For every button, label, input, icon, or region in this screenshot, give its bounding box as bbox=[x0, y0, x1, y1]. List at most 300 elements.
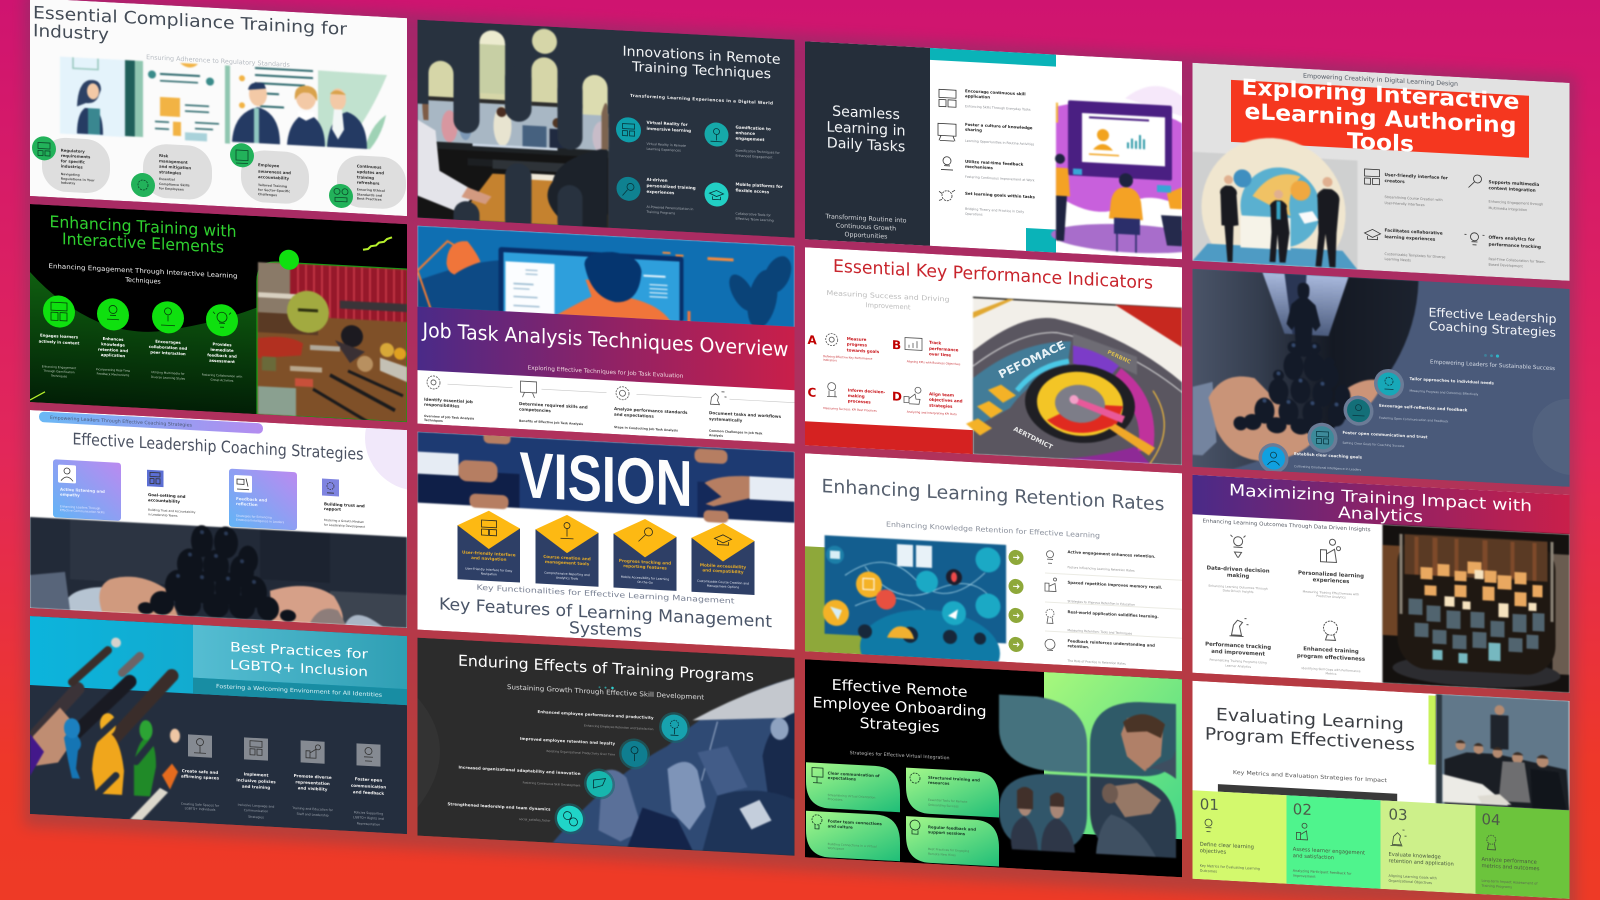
analytics benefits: Personalized learning bbox=[1298, 570, 1364, 580]
subtitle: Enhancing Learning Outcomes Through Data Driven Insights bbox=[1202, 518, 1371, 533]
tools list: performance tracking bbox=[1488, 242, 1541, 250]
task list: Encourage continuous skill bbox=[965, 88, 1026, 96]
subtitle: Fostering a Welcoming Environment for All Identities bbox=[216, 684, 382, 699]
effects list: Enhancing Employee Retention and Satisfaction bbox=[584, 723, 654, 731]
tools list: learning experiences bbox=[1384, 234, 1436, 243]
title: Evaluating Learning bbox=[1216, 705, 1404, 735]
feature cards: Progress tracking and bbox=[619, 558, 671, 566]
analytics benefits: Identifying Skill Gaps with Performance bbox=[1302, 666, 1361, 673]
retention tips list: The Role of Practice in Retention Rates bbox=[1067, 659, 1126, 666]
analytics benefits: Predictive Analytics bbox=[1316, 594, 1346, 599]
feature text: Gamification to bbox=[736, 125, 771, 131]
KPI list: strategies bbox=[929, 403, 953, 409]
gradient title band bbox=[418, 307, 794, 390]
feature bubbles: for specific bbox=[61, 158, 86, 165]
title bbox=[624, 46, 780, 80]
faint decorative circle bbox=[1532, 397, 1600, 477]
panel: Maximizing Training Impact with Analytics bbox=[1192, 475, 1570, 693]
strategy cards: Feedback and bbox=[236, 496, 267, 503]
four technique columns: competencies bbox=[519, 407, 551, 413]
title bbox=[1244, 78, 1518, 152]
faint arc bbox=[418, 698, 440, 809]
KPI list: Aligning KPIs with Business Objectives bbox=[907, 359, 961, 366]
feature cards: reporting features bbox=[623, 563, 667, 571]
coaching steps: Cultivating Emotional Intelligence in Leaders bbox=[1294, 464, 1362, 472]
numbered metric columns: 03 bbox=[1388, 805, 1408, 824]
feature text: peer interaction bbox=[150, 349, 186, 356]
business team bbox=[232, 106, 367, 149]
panel: Evaluating Learning Program Effectiveness bbox=[1192, 681, 1570, 899]
onboarding cards: resources bbox=[928, 780, 950, 786]
analytics benefits: Enhanced training bbox=[1303, 646, 1359, 655]
KPI list: Align team bbox=[929, 391, 954, 398]
practice columns: LGBTQ+ Rights and bbox=[353, 815, 384, 821]
feature text: experiences bbox=[646, 189, 675, 195]
compliance illustration bbox=[60, 57, 387, 152]
title: Key Features of Learning Management bbox=[439, 594, 772, 631]
title: Enhancing Training with bbox=[50, 212, 237, 241]
feature text: enhance bbox=[736, 130, 755, 136]
feature bubbles: and mitigation bbox=[159, 164, 191, 170]
numbered metric columns: retention and application bbox=[1388, 858, 1454, 868]
KPI list: A bbox=[808, 333, 817, 347]
VISION word: VISION bbox=[520, 438, 692, 520]
analytics benefits: Data-Driven Insights bbox=[1223, 588, 1254, 594]
strategy cards: Strategies for Enhancing bbox=[236, 514, 272, 520]
KPI list: processes bbox=[848, 398, 871, 405]
KPI list bbox=[808, 332, 963, 417]
coaching steps: Tailor approaches to individual needs bbox=[1409, 376, 1495, 385]
strategy cards: Emotional Intelligence in Leaders bbox=[236, 518, 285, 524]
onboarding cards: Building Connections in a Virtual bbox=[828, 842, 877, 849]
workshop photo bbox=[257, 261, 407, 424]
effects list: Boosting Organizational Productivity Over Time bbox=[547, 749, 615, 757]
pawns photo bbox=[30, 516, 407, 628]
pager dots bbox=[598, 686, 614, 689]
retention tips list bbox=[1008, 546, 1182, 669]
four technique columns: Overview of Job Task Analysis bbox=[424, 414, 474, 421]
four technique columns: Determine required skills and bbox=[519, 401, 588, 410]
knowledge network illustration bbox=[823, 535, 1006, 694]
KPI list: Measuring Success: KPI Best Practices bbox=[823, 406, 877, 413]
feature bubbles bbox=[32, 132, 406, 211]
title bbox=[1229, 480, 1532, 532]
subtitle: Improvement bbox=[866, 301, 911, 312]
feature text bbox=[38, 334, 242, 382]
green block bbox=[805, 546, 959, 659]
tools list bbox=[1364, 169, 1546, 270]
analytics benefits: Enhancing Learning Outcomes Through bbox=[1208, 584, 1268, 591]
strategy cards: Building trust and bbox=[324, 501, 365, 508]
coaching steps: Measuring Progress and Outcomes Effectively bbox=[1409, 389, 1478, 396]
desk illustration bbox=[418, 226, 797, 333]
title panel bbox=[193, 625, 407, 689]
four technique columns: systematically bbox=[709, 416, 743, 423]
feature text: Virtual Reality for bbox=[646, 120, 688, 127]
business illustration bbox=[1192, 137, 1358, 270]
retention tips list: Factors Influencing Learning Retention Rates bbox=[1068, 565, 1135, 573]
four technique columns: Document tasks and workflows bbox=[709, 410, 782, 419]
teal accent blocks bbox=[930, 48, 1056, 253]
panel: Seamless Learning in Daily Tasks bbox=[805, 41, 1211, 261]
feature cards: Course creation and bbox=[543, 554, 591, 561]
KPI list: progress bbox=[847, 341, 868, 348]
practice columns: Create safe and bbox=[182, 768, 218, 775]
feature cards: On-the-Go bbox=[637, 580, 653, 585]
numbered metric columns: Evaluate knowledge bbox=[1388, 852, 1441, 861]
practice columns: Training and Education for bbox=[291, 806, 334, 812]
feature text: AI-driven bbox=[646, 177, 668, 183]
feature bubbles: requirements bbox=[61, 153, 91, 159]
KPI list: over time bbox=[929, 351, 951, 357]
title bbox=[813, 677, 987, 739]
feature text: Feedback Mechanisms bbox=[97, 372, 130, 377]
subtitle: Empowering Creativity in Digital Learning Design bbox=[1303, 73, 1458, 88]
numbered metric columns: Analyze performance bbox=[1482, 857, 1537, 866]
practice columns: Staff and Leadership bbox=[297, 812, 329, 818]
tools list: Learning Needs bbox=[1384, 257, 1411, 262]
KPI list: Track bbox=[929, 340, 942, 345]
title: Program Effectiveness bbox=[1205, 724, 1415, 756]
numbered metric columns: Long-term Impact Assessment of bbox=[1482, 879, 1538, 886]
subtitle: Transforming Learning Experiences in a Digital World bbox=[630, 93, 773, 106]
feature bubbles: management bbox=[159, 158, 188, 165]
title: Best Practices for bbox=[230, 640, 369, 663]
panel: Essential Compliance Training bbox=[30, 0, 407, 216]
retention tips list: Feedback reinforces understanding and bbox=[1068, 638, 1155, 648]
panel: Innovations in Remote Training bbox=[418, 20, 794, 259]
feature cards: and compatibility bbox=[702, 567, 744, 575]
panel: Job Task Analysis Techniques Overview bbox=[418, 226, 797, 444]
feature bubbles: awareness and bbox=[258, 169, 291, 175]
analytics benefits: experiences bbox=[1313, 577, 1349, 585]
practice columns: communication bbox=[351, 783, 386, 790]
onboarding cards: Clear communication of bbox=[828, 770, 880, 778]
KPI list: objectives and bbox=[929, 397, 963, 404]
panel: Essential Key Performance Indicators bbox=[805, 247, 1182, 465]
feature bubbles: Industry bbox=[61, 181, 75, 185]
analytics benefits: Measuring Training Effectiveness with bbox=[1303, 589, 1359, 596]
subtitle bbox=[826, 214, 906, 238]
analytics benefits: program effectiveness bbox=[1297, 653, 1365, 663]
task list: Fostering Continuous Improvement at Work bbox=[965, 175, 1035, 182]
numbered metric columns: 02 bbox=[1293, 800, 1312, 819]
onboarding cards: Regular feedback and bbox=[928, 824, 976, 832]
subtitle bbox=[49, 263, 237, 284]
numbered metric columns: metrics and outcomes bbox=[1482, 863, 1540, 872]
gradient title band bbox=[1192, 475, 1570, 534]
feature bubbles: updates and bbox=[357, 169, 384, 175]
practice columns: Representation bbox=[357, 821, 380, 827]
feature cards: and navigation bbox=[471, 555, 506, 562]
numbered metric columns: Training Programs bbox=[1481, 884, 1512, 889]
feature text: collaboration and bbox=[149, 344, 187, 351]
practice columns: LGBTQ+ Individuals bbox=[185, 806, 216, 812]
onboarding cards: Remote New Hires bbox=[928, 852, 956, 857]
strategy cards: Enhancing Leaders Through bbox=[60, 504, 101, 510]
effects list: Fostering Continuous Skill Development bbox=[523, 781, 581, 788]
effects list bbox=[448, 700, 690, 841]
title bbox=[1205, 704, 1415, 756]
strategy cards: rapport bbox=[324, 506, 341, 512]
subtitle: Strategies for Effective Virtual Integration bbox=[850, 750, 950, 761]
cyan header bbox=[30, 616, 407, 705]
numbered metric columns: Aligning Learning Goals with bbox=[1388, 874, 1437, 880]
feature bubbles: Ensuring Ethical bbox=[357, 187, 385, 193]
subtitle: Techniques bbox=[124, 276, 161, 286]
numbered metric columns bbox=[1192, 790, 1570, 899]
standing learner bbox=[1056, 168, 1070, 196]
numbered metric columns: Outcomes bbox=[1200, 869, 1217, 874]
feature text: Utilizing Multimedia for bbox=[151, 370, 186, 376]
feature bubbles: training bbox=[357, 174, 374, 180]
green backdrop bbox=[1044, 672, 1182, 839]
title: Learning in bbox=[826, 119, 906, 140]
feature text: engagement bbox=[736, 136, 765, 142]
feature bubbles: Tailored Training bbox=[258, 183, 287, 188]
title: Industry bbox=[33, 21, 109, 45]
VISION banner photo bbox=[418, 428, 794, 527]
title: LGBTQ+ Inclusion bbox=[230, 658, 368, 680]
petal portrait collage bbox=[999, 695, 1176, 858]
four technique columns: Analyze performance standards bbox=[614, 406, 688, 415]
strategy cards: empathy bbox=[60, 492, 80, 498]
practice columns: affirming spaces bbox=[181, 774, 220, 781]
practice columns: and feedback bbox=[353, 789, 384, 796]
corner circle bbox=[365, 388, 465, 493]
feature text: Through Gamification bbox=[42, 369, 75, 374]
onboarding cards: Foster team connections bbox=[828, 818, 883, 826]
title: eLearning Authoring bbox=[1244, 100, 1516, 139]
effects list: Strengthened leadership and team dynamics bbox=[447, 801, 551, 812]
retention tips list: Real-world application solidifies learning. bbox=[1068, 609, 1159, 619]
title: Essential Key Performance Indicators bbox=[833, 257, 1153, 294]
practice columns: Policies Supporting bbox=[354, 810, 383, 816]
title: Effective Remote bbox=[832, 678, 968, 701]
performance gauge photo bbox=[966, 296, 1182, 465]
tools list: Offers analytics for bbox=[1488, 235, 1536, 243]
strategy cards: Fostering a Growth Mindset bbox=[324, 518, 365, 524]
feature text: Effective Team Learning bbox=[736, 217, 774, 223]
KPI list: D bbox=[892, 389, 902, 404]
analytics benefits: and improvement bbox=[1211, 649, 1265, 658]
coaching steps: Fostering Open Communication and Feedback bbox=[1379, 416, 1449, 423]
title: Innovations in Remote bbox=[622, 44, 780, 68]
four technique columns: Identify essential job bbox=[424, 397, 473, 404]
title: Enhancing Learning Retention Rates bbox=[822, 476, 1164, 515]
panel: Effective Remote Employee Onboarding Strategies bbox=[805, 659, 1182, 877]
four technique columns bbox=[424, 375, 794, 442]
numbered metric columns: objectives bbox=[1200, 848, 1226, 856]
practice columns: Creating Safe Spaces for bbox=[181, 802, 220, 808]
panel: Key Features of LMS bbox=[418, 428, 794, 650]
subtitle: Empowering Leaders for Sustainable Success bbox=[1430, 359, 1555, 372]
title bbox=[1428, 305, 1556, 340]
practice columns: Foster open bbox=[355, 776, 382, 783]
practice columns: Promote diverse bbox=[294, 773, 332, 780]
analytics benefits: Learner Analytics bbox=[1225, 664, 1252, 669]
task list: application bbox=[965, 93, 990, 100]
feature bubbles: industries bbox=[61, 163, 83, 170]
onboarding cards: and culture bbox=[828, 823, 853, 830]
onboarding cards: support sessions bbox=[928, 829, 966, 836]
task list: Operations bbox=[965, 212, 983, 217]
tools list: Real-Time Collaboration for Team- bbox=[1488, 257, 1546, 264]
feature bubbles: Risk bbox=[159, 153, 169, 158]
feature cards: Navigation bbox=[481, 572, 497, 576]
tools list: Streamlining Course Creation with bbox=[1384, 195, 1443, 202]
effects list: Enhanced employee performance and productivity bbox=[538, 709, 654, 720]
feature bubbles: Regulations in Your bbox=[61, 177, 95, 182]
four technique columns: Techniques bbox=[424, 418, 443, 423]
numbered metric columns: 01 bbox=[1200, 795, 1219, 814]
feature bubbles: for Sector-Specific bbox=[258, 188, 290, 193]
feature bubbles: Navigating bbox=[61, 172, 80, 177]
feature text bbox=[646, 120, 783, 223]
numbered metric columns: Improvement bbox=[1293, 874, 1316, 879]
tools list: Enhancing Engagement through bbox=[1488, 200, 1543, 206]
panel: Enduring Effects of Training Programs bbox=[418, 638, 794, 856]
KPI list: performance bbox=[929, 346, 959, 352]
title: Daily Tasks bbox=[827, 135, 905, 156]
four technique columns: responsibilities bbox=[424, 402, 460, 409]
feature cards bbox=[458, 509, 754, 595]
onboarding cards: expectations bbox=[828, 775, 857, 782]
feature text: Incorporating Real-Time bbox=[96, 367, 130, 373]
subtitle: Ensuring Adherence to Regulatory Standards bbox=[146, 53, 291, 69]
decorative accent dot bbox=[279, 249, 299, 270]
feature text: Group Activities bbox=[211, 378, 234, 383]
onboarding cards: Streamlining Virtual Orientation bbox=[828, 793, 875, 800]
subtitle: Sustaining Growth Through Effective Skill Development bbox=[507, 683, 704, 702]
title: Employee Onboarding bbox=[813, 695, 987, 720]
performance gauge photo: AERTDMICT bbox=[1012, 425, 1054, 451]
feature bubbles: accountability bbox=[258, 174, 290, 181]
title: Tools bbox=[1347, 129, 1414, 158]
feature text: Enhances bbox=[103, 336, 124, 342]
feature text: Mobile platforms for bbox=[736, 182, 783, 189]
four technique columns: Steps in Conducting Job Task Analysis bbox=[614, 425, 678, 432]
practice columns: Strategies bbox=[248, 815, 264, 819]
feature text: Enhancing Engagement bbox=[42, 364, 77, 370]
KPI list: Indicators bbox=[823, 358, 837, 363]
KPI list: making bbox=[848, 393, 865, 399]
feature text: Diverse Learning Styles bbox=[151, 375, 186, 381]
title bbox=[828, 105, 905, 152]
subtitle: Key Functionalities for Effective Learning Management bbox=[477, 583, 735, 605]
feature bubbles: strategies bbox=[159, 169, 182, 175]
feature cards: Management Options bbox=[707, 584, 740, 589]
green wave bbox=[30, 272, 260, 414]
task list bbox=[938, 87, 1035, 219]
effects list: Increased organizational adaptability and innovation bbox=[459, 764, 581, 776]
meeting photo in arched mosaic bbox=[418, 28, 610, 228]
title: Essential Compliance Training for bbox=[33, 3, 347, 40]
feature text: feedback and bbox=[207, 352, 237, 359]
panel: Enhancing Training with Interactive Elements bbox=[30, 204, 407, 424]
subtitle: Enhancing Knowledge Retention for Effective Learning bbox=[886, 521, 1100, 540]
feature text: Provides bbox=[212, 341, 232, 347]
title: Exploring Interactive bbox=[1241, 75, 1519, 115]
strategy cards bbox=[53, 459, 366, 534]
analytics benefits: making bbox=[1227, 573, 1249, 580]
title: Effective Leadership bbox=[1428, 305, 1556, 326]
red footer bar bbox=[805, 421, 973, 454]
analytics benefits: Personalizing Training Programs Using bbox=[1210, 658, 1267, 665]
task list: sharing bbox=[965, 127, 982, 133]
onboarding cards: Onboarding Success bbox=[928, 803, 959, 808]
panel: Effective Leadership Coaching Strategies, white bbox=[30, 370, 465, 631]
feature text: immersive learning bbox=[646, 126, 691, 133]
analytics benefits: Metrics bbox=[1326, 671, 1337, 676]
strategy cards: Active listening and bbox=[60, 487, 105, 494]
numbered metric columns: Define clear learning bbox=[1200, 842, 1254, 851]
strategy cards: Building Trust and Accountability bbox=[148, 508, 196, 514]
onboarding cards: Processes bbox=[828, 797, 843, 802]
workshop duotone photo bbox=[552, 665, 794, 856]
subtitle: Transforming Routine into bbox=[824, 213, 907, 225]
title: Effective Leadership Coaching Strategies bbox=[72, 429, 363, 464]
feature bubbles: Essential bbox=[159, 177, 175, 182]
feature text: assessment bbox=[209, 358, 235, 364]
feature cards: Comprehensive Reporting and bbox=[544, 571, 590, 577]
tools list: Multimedia Integration bbox=[1488, 206, 1527, 212]
feature cards: management tools bbox=[545, 559, 590, 566]
classroom illustration bbox=[1050, 86, 1182, 254]
boardroom photo bbox=[1436, 694, 1570, 811]
feature text: flexible access bbox=[736, 188, 770, 194]
pager dots bbox=[1484, 354, 1499, 358]
coaching steps: Encourage self-reflection and feedback bbox=[1379, 403, 1468, 412]
feature bubbles: Compliance Skills bbox=[159, 182, 190, 188]
dark divider bar bbox=[1218, 784, 1397, 801]
seated learner bbox=[1109, 186, 1143, 220]
panel: Enhancing Learning Retention Rates bbox=[805, 453, 1182, 703]
tools list: Supports multimedia bbox=[1488, 179, 1539, 188]
title bbox=[439, 594, 772, 648]
subtitle bbox=[826, 289, 950, 314]
title bbox=[51, 215, 236, 253]
feature text: AI-Powered Personalization in bbox=[646, 205, 693, 211]
feature cards: Customizable Course Creation and bbox=[697, 579, 749, 586]
onboarding cards bbox=[806, 762, 999, 867]
performance gauge photo: PERBNC bbox=[1106, 350, 1132, 366]
subtitle: Continuous Growth bbox=[836, 222, 896, 233]
subtitle: Opportunities bbox=[845, 231, 887, 241]
tagline pill: Empowering Leaders Through Effective Coaching Strategies bbox=[50, 415, 193, 429]
task list: mechanisms bbox=[965, 164, 994, 170]
title: Interactive Elements bbox=[62, 229, 224, 257]
panel: Best Practices for LGBTQ+ Inclusion bbox=[30, 616, 407, 834]
coaching steps: Setting Clear Goals for Coaching Success bbox=[1342, 441, 1405, 448]
strategy cards: in Leadership Teams bbox=[148, 512, 178, 518]
red title banner bbox=[1231, 80, 1529, 158]
feature icons bbox=[616, 117, 728, 207]
tools list: Customizable Templates for Diverse bbox=[1384, 252, 1445, 259]
tools list: creators bbox=[1384, 178, 1405, 185]
onboarding cards: Workspace bbox=[828, 846, 844, 851]
feature cards: Mobile accessibility bbox=[700, 562, 746, 570]
data cylinder photo bbox=[1382, 524, 1570, 693]
feature text: Learning Experiences bbox=[646, 147, 681, 153]
numbered metric columns: Analyzing Participant Feedback for bbox=[1293, 869, 1352, 876]
leader photo bbox=[1192, 269, 1418, 479]
title: Maximizing Training Impact with bbox=[1229, 480, 1532, 515]
KPI list: towards goals bbox=[847, 347, 880, 354]
title: Enduring Effects of Training Programs bbox=[458, 651, 754, 685]
woman bbox=[77, 108, 103, 135]
diverse figures art bbox=[30, 633, 180, 822]
